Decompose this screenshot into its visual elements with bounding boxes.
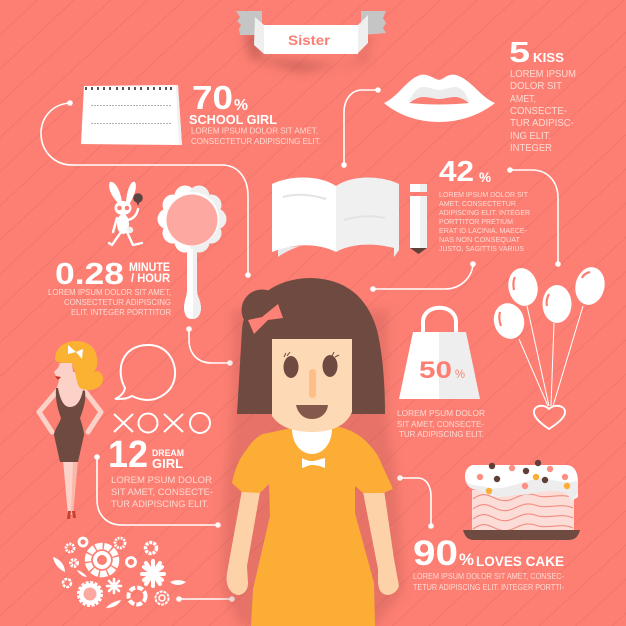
connector: lips to book	[341, 87, 381, 168]
collar	[292, 428, 332, 454]
icon: open book	[272, 177, 399, 257]
stat: 0.28 minute per hour: MINUTE	[129, 262, 170, 274]
stat: 5 kiss: AMET,	[510, 94, 536, 105]
nose	[309, 369, 316, 398]
stat: 70% school girl	[189, 79, 321, 146]
icon: speech bubble	[115, 345, 175, 400]
icon: notebook	[81, 85, 182, 145]
stat: 5 kiss: KISS	[533, 50, 564, 65]
title ribbon	[236, 11, 386, 72]
stat: 5 kiss: ING ELIT.	[510, 131, 551, 142]
title text: Sister	[288, 32, 331, 48]
stat: 90% loves cake: LOREM IPSUM DOLOR SIT AMET, CONSEC-	[413, 571, 564, 581]
stat: 5 kiss: LOREM IPSUM	[510, 69, 576, 80]
eyes	[284, 356, 298, 378]
icon: hand mirror	[158, 186, 226, 319]
stat: 90% loves cake: 90	[413, 534, 458, 573]
connector: text to girl	[370, 261, 476, 292]
stat: 90% loves cake: LOVES CAKE	[476, 554, 564, 569]
connector: 42% to balloons	[507, 167, 561, 267]
text: bag caption: TUR ADIPISCING ELIT.	[399, 429, 484, 439]
mouth	[296, 405, 328, 419]
stat: 12 dream girl: TUR ADIPISCING ELIT.	[111, 499, 209, 509]
connector: mirror to girl	[186, 326, 233, 366]
stat: 42%: %	[479, 169, 492, 185]
icon: weight bag 50%: %	[455, 367, 465, 381]
stat: 5 kiss: CONSECTE-	[510, 106, 567, 117]
stat: 5 kiss: 5	[509, 37, 530, 69]
hair	[237, 278, 385, 414]
stat: 90% loves cake: %	[459, 550, 474, 569]
eyelashes	[284, 352, 339, 357]
icon: weight bag 50%	[399, 308, 480, 399]
stat: 5 kiss: DOLOR SIT	[510, 81, 562, 92]
girl character	[222, 278, 404, 626]
icon: cake	[463, 460, 580, 540]
stat: 70% school girl: 70	[192, 79, 233, 116]
icon: flower cluster	[53, 538, 186, 608]
icon: weight bag 50%: 50	[419, 357, 452, 384]
shadow	[222, 310, 404, 626]
icon: blonde woman	[39, 341, 103, 519]
icon: xoxo	[114, 413, 210, 433]
stat: 5 kiss: INTEGER	[510, 143, 552, 154]
stat: 5 kiss: TUR ADIPISC-	[510, 118, 574, 129]
dress	[232, 426, 393, 626]
connector: dream girl	[94, 454, 221, 528]
stat: 42%: 42	[439, 156, 474, 188]
stat: 0.28 minute per hour: 0.28	[55, 256, 124, 291]
connector: flowers to girl	[176, 596, 235, 602]
stat: 42%: LOREM IPSUM DOLOR SIT	[439, 190, 528, 199]
bow tie	[302, 458, 325, 468]
stat: 70% school girl: LOREM IPSUM DOLOR SIT AMET,	[191, 126, 318, 136]
stat: 42%: JUSTO, SAGITTIS VARIUS	[439, 244, 524, 253]
icon: balloons and heart	[490, 264, 608, 429]
stat: 42%: NAS NON CONSEQUAT	[439, 235, 520, 244]
connector: notebook to girl	[41, 100, 251, 278]
stat: 0.28 minute per hour: LOREM IPSUM DOLOR SIT AMET,	[48, 287, 171, 297]
connector: girl to cake	[397, 475, 434, 529]
stat: 42%: ADIPISCING ELIT. INTEGER	[439, 208, 531, 217]
stat: 12 dream girl: DREAM	[152, 448, 184, 459]
icon: rabbit	[109, 182, 143, 245]
arms	[227, 490, 399, 595]
icon: lips	[384, 75, 495, 122]
face	[272, 339, 352, 432]
stat: 0.28 minute per hour	[48, 256, 171, 317]
stat: 90% loves cake: TETUR ADIPISCING ELIT. INTEGER PORTTI-	[413, 582, 564, 592]
stat: 12 dream girl: SIT AMET, CONSECTE-	[111, 487, 213, 497]
stat: 42%	[439, 156, 531, 253]
stat: 5 kiss	[509, 37, 576, 154]
stat: 0.28 minute per hour: CONSECTETUR ADIPISCING	[64, 297, 171, 307]
text: bag caption: LOREM PSUM DOLOR	[397, 408, 485, 418]
stat: 0.28 minute per hour: ELIT. INTEGER PORTTITOR	[71, 307, 171, 317]
text: bag caption: SIT AMET, CONSECTE-	[397, 419, 484, 429]
stat: 12 dream girl	[108, 434, 213, 509]
stat: 0.28 minute per hour: / HOUR	[131, 273, 171, 285]
stat: 42%: AMET, CONSECTETUR	[439, 199, 517, 208]
stat: 42%: ERAT ID LACINIA. MAECE-	[439, 226, 527, 235]
text: bag caption	[397, 408, 485, 439]
stat: 70% school girl: %	[234, 97, 248, 114]
stat: 12 dream girl: GIRL	[152, 456, 183, 471]
stat: 12 dream girl: 12	[108, 434, 148, 476]
stat: 70% school girl: SCHOOL GIRL	[189, 112, 277, 127]
stat: 70% school girl: CONSECTETUR ADIPISCING ELIT.	[191, 136, 321, 146]
stat: 90% loves cake	[413, 534, 564, 592]
stat: 12 dream girl: LOREM PSUM DOLOR	[111, 475, 212, 485]
icon: pencil	[410, 184, 427, 254]
stat: 42%: PORTTITOR PRETIUM	[439, 217, 513, 226]
bow	[248, 304, 283, 334]
